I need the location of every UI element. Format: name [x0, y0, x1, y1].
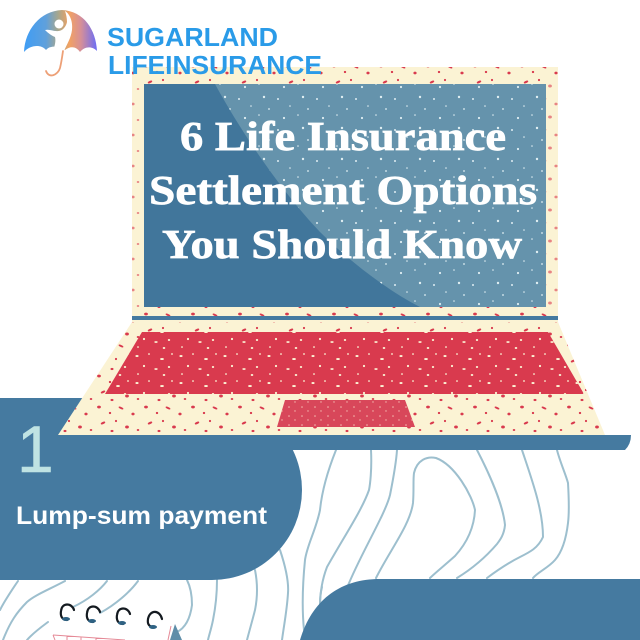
title: [149, 113, 537, 267]
notebook grid: [53, 635, 125, 640]
option number: 1: [17, 412, 54, 486]
logo: [24, 10, 322, 80]
logo text: SUGARLAND: [107, 22, 278, 52]
option label: Lump-sum payment: [16, 502, 268, 530]
title: You Should Know: [162, 221, 522, 267]
trackpad: [277, 400, 415, 427]
title: Settlement Options: [149, 167, 537, 213]
notebook rings: [61, 604, 162, 627]
icon: umbrella: [24, 10, 97, 75]
logo text: LIFEINSURANCE: [108, 50, 322, 80]
laptop keyboard deck: [58, 322, 605, 435]
contour line background: [0, 450, 569, 640]
title: 6 Life Insurance: [180, 113, 506, 159]
laptop hinge: [132, 316, 558, 320]
notebook illustration: [53, 604, 182, 640]
laptop lid: [132, 67, 558, 323]
panel: bottom right next option: [300, 579, 640, 640]
laptop screen: [144, 84, 546, 307]
laptop base shadow bar: [58, 435, 631, 450]
keyboard: [105, 332, 584, 394]
laptop illustration: [58, 67, 631, 450]
pen tip: [170, 624, 182, 640]
panel: option 1 lump-sum payment: [0, 398, 302, 580]
logo text: [107, 22, 322, 80]
ring shadows: [62, 617, 157, 629]
